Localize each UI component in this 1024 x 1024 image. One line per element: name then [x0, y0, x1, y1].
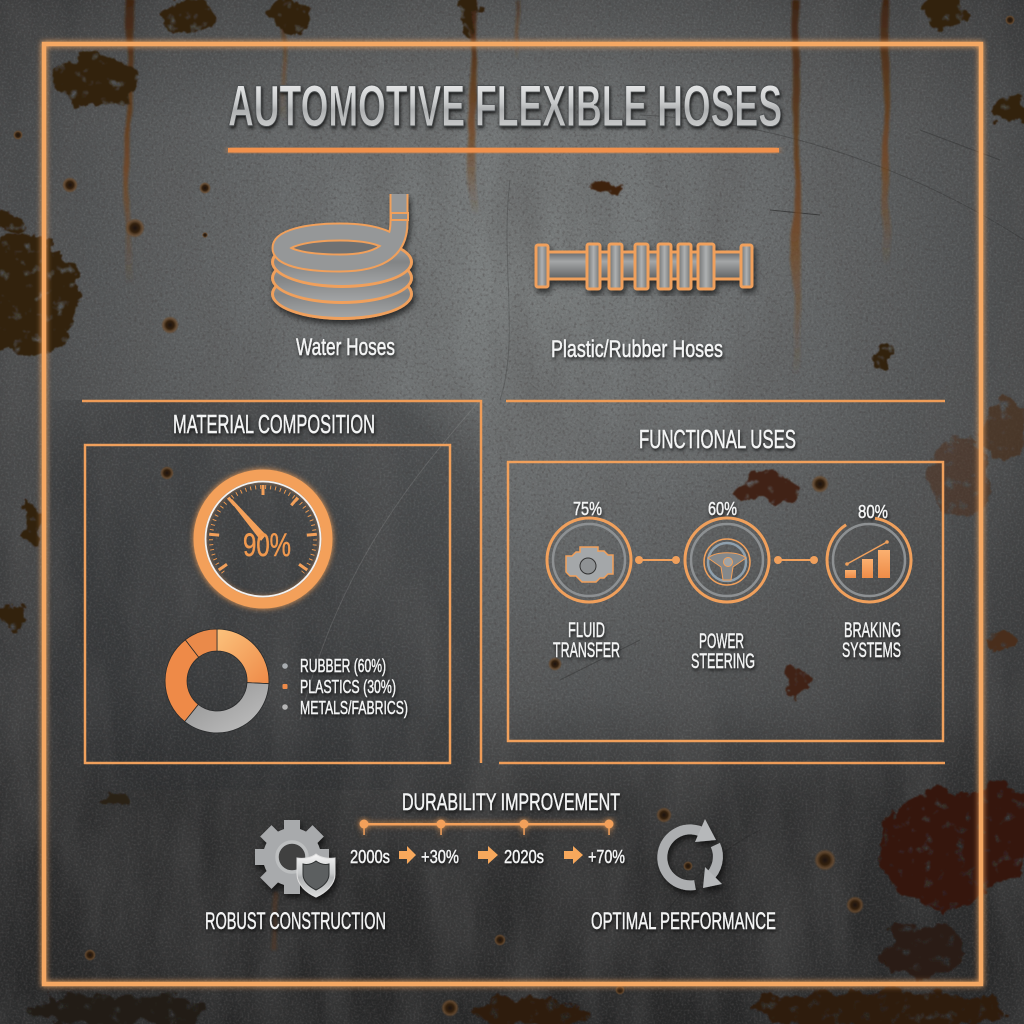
use: fluid transfer: 75%: [573, 499, 602, 519]
gauge: 90%: 90%: [243, 527, 291, 563]
timeline: [360, 820, 614, 835]
use: braking systems: BRAKING: [844, 619, 901, 642]
use: braking systems: 80%: [858, 502, 888, 522]
legend: materials: METALS/FABRICS): [300, 698, 408, 718]
timeline labels and arrows: +30%: [421, 847, 459, 867]
timeline labels and arrows: 2020s: [504, 847, 544, 867]
functional panel box: [508, 462, 943, 741]
icon: plastic/rubber hose: [536, 244, 752, 289]
use: power steering: POWER: [699, 630, 744, 653]
label: water hoses: Water Hoses: [296, 334, 395, 361]
donut chart: materials: [165, 629, 269, 733]
use: fluid transfer: [547, 499, 631, 662]
label: robust construction: ROBUST CONSTRUCTION: [205, 908, 386, 935]
use: fluid transfer: FLUID: [568, 619, 605, 642]
heading: material composition: MATERIAL COMPOSITION: [173, 409, 375, 439]
use: power steering: [685, 499, 769, 673]
timeline labels and arrows: [350, 846, 625, 867]
use: braking systems: [827, 502, 911, 662]
use: power steering: 60%: [708, 499, 737, 519]
timeline labels and arrows: 2000s: [350, 847, 390, 867]
connector: [774, 556, 818, 564]
panel: material composition: [82, 401, 481, 763]
title underline: [228, 148, 779, 152]
icon: circular arrows: [662, 819, 722, 888]
icon: gear with shield: [255, 820, 335, 897]
gauge: 90%: [199, 475, 327, 603]
legend: materials: [282, 656, 408, 718]
legend: materials: RUBBER (60%): [300, 656, 386, 676]
connector: [635, 556, 680, 564]
label: optimal performance: OPTIMAL PERFORMANCE: [591, 908, 776, 935]
use: braking systems: SYSTEMS: [842, 639, 901, 662]
panel: functional uses: [499, 401, 945, 763]
use: fluid transfer: TRANSFER: [553, 639, 620, 662]
label: plastic/rubber hoses: Plastic/Rubber Hoses: [551, 336, 723, 363]
legend: materials: PLASTICS (30%): [300, 677, 396, 697]
heading: functional uses: FUNCTIONAL USES: [639, 424, 796, 454]
use: power steering: STEERING: [691, 650, 755, 673]
heading: durability improvement: DURABILITY IMPROVEMENT: [402, 789, 620, 816]
section: durability improvement: [350, 789, 625, 867]
material panel box: [85, 445, 450, 763]
timeline labels and arrows: +70%: [588, 847, 625, 867]
icon: coiled water hose: [271, 194, 413, 320]
